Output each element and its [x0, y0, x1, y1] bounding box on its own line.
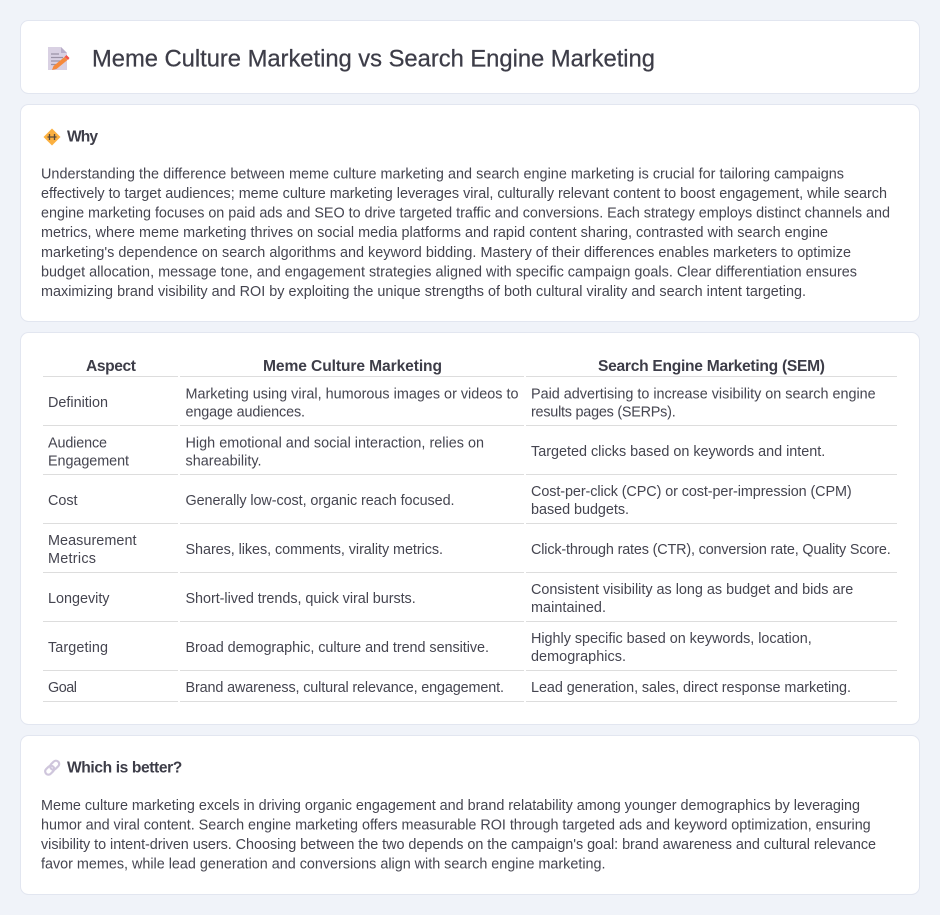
row: goal: Brand awareness, cultural relevance, engagement. — [186, 680, 504, 696]
row: measurement metrics — [43, 533, 897, 573]
row: goal: Goal — [48, 680, 77, 696]
text block: why explanation: maximizing brand visibility and ROI by exploiting the unique strengths of both cultural virality and search intent targeting. — [41, 284, 806, 300]
row: longevity: Consistent visibility as long as budget and bids are — [531, 582, 853, 598]
row: definition: Marketing using viral, humorous images or videos to — [186, 386, 518, 402]
row: audience engagement: Targeted clicks based on keywords and intent. — [531, 444, 825, 460]
row: goal: Lead generation, sales, direct response marketing. — [531, 680, 851, 696]
text block: verdict: humor and viral content. Search engine marketing offers measurable ROI through targeted ads and keyword optimization, ensuring — [41, 818, 871, 834]
row: audience engagement: shareability. — [186, 453, 262, 469]
row: cost — [43, 484, 897, 524]
text block: why explanation: marketing's dependence on search algorithms and keyword bidding. Mastery of their differences enables marketers to optimize — [41, 245, 851, 261]
row: targeting — [43, 631, 897, 671]
panel: page title — [20, 20, 920, 94]
row: audience engagement: High emotional and social interaction, relies on — [186, 435, 484, 451]
icon: orange diamond — [44, 128, 60, 146]
table header: Search Engine Marketing (SEM) — [598, 358, 825, 375]
heading: why: Why — [67, 128, 98, 146]
heading: which is better: Which is better? — [67, 760, 182, 777]
row: audience engagement: Audience — [48, 435, 107, 451]
icon: chain link — [44, 759, 61, 776]
table header: Meme Culture Marketing — [263, 358, 442, 375]
text block: verdict — [41, 798, 876, 873]
row: targeting: demographics. — [531, 649, 626, 665]
row: targeting: Highly specific based on keywords, location, — [531, 631, 812, 647]
table header: Aspect — [86, 358, 136, 375]
panel: comparison table — [20, 332, 920, 724]
row: measurement metrics: Measurement — [48, 533, 136, 549]
row: goal — [43, 680, 897, 702]
row: definition: Definition — [48, 395, 108, 411]
row: definition: engage audiences. — [186, 404, 305, 420]
row: targeting: Targeting — [48, 640, 108, 656]
title: Meme Culture Marketing vs Search Engine Marketing — [92, 46, 655, 72]
text block: verdict: visibility to intent-driven users. Choosing between the two depends on the campaign's goal: brand awareness and cultural relevance — [41, 837, 876, 853]
row: cost: Cost — [48, 493, 78, 509]
icon: document with pencil — [48, 47, 70, 70]
row: definition: results pages (SERPs). — [531, 404, 676, 420]
table header — [43, 358, 897, 377]
panel: which is better — [20, 736, 920, 894]
text block: why explanation: engine marketing focuses on paid ads and SEO to drive targeted traffic and conversions. Each strategy employs distinct channels and — [41, 206, 890, 222]
text block: why explanation: metrics, where meme marketing thrives on social media platforms and rapid content sharing, contrasted with search engine — [41, 225, 828, 241]
row: cost: Generally low-cost, organic reach focused. — [186, 493, 454, 509]
row: longevity: Longevity — [48, 591, 110, 607]
row: audience engagement — [43, 435, 897, 475]
text block: verdict: Meme culture marketing excels in driving organic engagement and brand relatability among younger demographics by leveraging — [41, 798, 860, 814]
row: longevity — [43, 582, 897, 622]
text block: verdict: favor memes, while lead generation and conversions align with search engine marketing. — [41, 857, 606, 873]
row: targeting: Broad demographic, culture and trend sensitive. — [186, 640, 489, 656]
text block: why explanation: effectively to target audiences; meme culture marketing leverages viral, culturally relevant content to boost engagement, while search — [41, 186, 887, 202]
panel: why — [20, 104, 920, 322]
row: cost: based budgets. — [531, 502, 629, 518]
text block: why explanation — [41, 166, 890, 300]
row: measurement metrics: Click-through rates (CTR), conversion rate, Quality Score. — [531, 542, 891, 558]
row: definition: Paid advertising to increase visibility on search engine — [531, 386, 876, 402]
row: longevity: Short-lived trends, quick viral bursts. — [186, 591, 416, 607]
row: longevity: maintained. — [531, 600, 606, 616]
row: cost: Cost-per-click (CPC) or cost-per-impression (CPM) — [531, 484, 852, 500]
text block: why explanation: Understanding the difference between meme culture marketing and search engine marketing is crucial for tailoring campaigns — [41, 166, 844, 182]
row: definition — [43, 386, 897, 426]
row: audience engagement: Engagement — [48, 453, 129, 469]
text block: why explanation: budget allocation, message tone, and engagement strategies aligned with specific campaign goals. Clear differentiation ensures — [41, 264, 857, 280]
row: measurement metrics: Metrics — [48, 551, 96, 567]
row: measurement metrics: Shares, likes, comments, virality metrics. — [186, 542, 443, 558]
